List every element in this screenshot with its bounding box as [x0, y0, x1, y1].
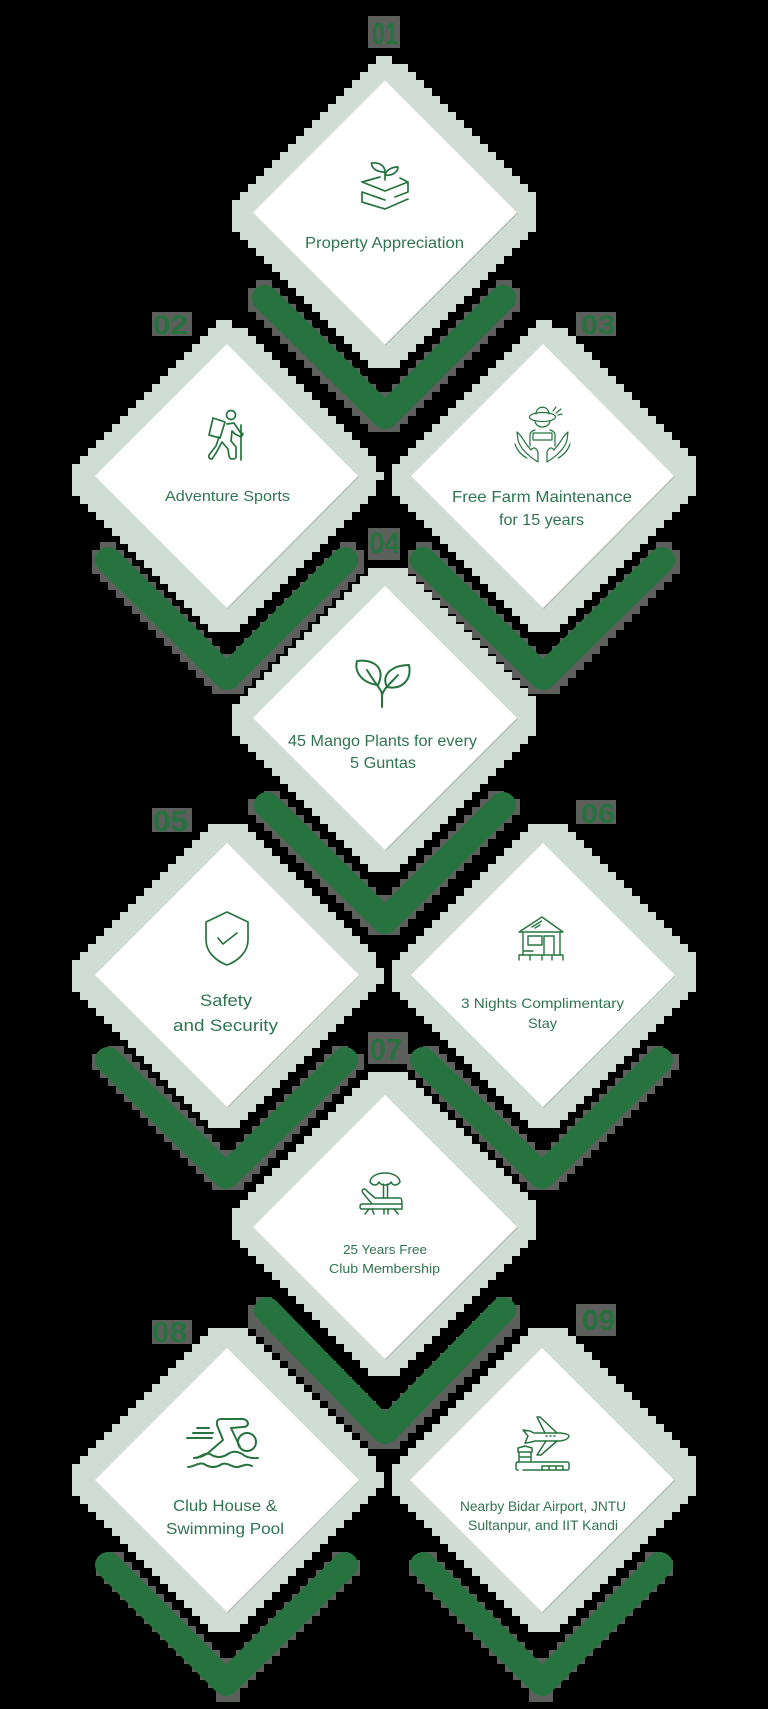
- chevron: below 08: [96, 1552, 360, 1702]
- icon: sun lounger and parasol: [360, 1173, 402, 1214]
- diamond 09: [392, 1328, 696, 1632]
- diamond 06: [392, 824, 696, 1128]
- icon: farmer with hands: [515, 407, 570, 462]
- panel: 01 Property Appreciation: [232, 16, 536, 368]
- diamond 01: [232, 56, 536, 368]
- chevron: below 06: [407, 1046, 679, 1190]
- panel: 09 Nearby Bidar Airport: [392, 1304, 696, 1632]
- diamond 03: [392, 320, 696, 632]
- diamond 05: [72, 824, 384, 1128]
- icon: swimmer: [187, 1419, 258, 1467]
- chevron: below 03: [408, 542, 680, 694]
- label: 25 Years Free Club Membership: [329, 1242, 440, 1276]
- number 07: 07: [370, 1032, 402, 1067]
- number 09: 09: [582, 1305, 615, 1337]
- label: Adventure Sports: Adventure Sports: [165, 488, 290, 505]
- label: 25 Years Free Club Membership: Club Membership: [329, 1261, 440, 1276]
- label: 45 Mango Plants for every 5 Guntas: 45 Mango Plants for every: [288, 733, 477, 750]
- icon: airplane and airport: [516, 1417, 569, 1470]
- chevron: below 02: [92, 542, 364, 694]
- diamond 07: [232, 1072, 536, 1376]
- icon: cottage: [519, 917, 563, 960]
- label: Club House & Swimming Pool: Club House &: [173, 1498, 277, 1515]
- chevron: below 07: [248, 1297, 520, 1449]
- panel: 04 45 Mango Plants: [232, 527, 536, 872]
- panel: 03 Free Farm Maintenance: [392, 310, 696, 632]
- diamond 04: [232, 568, 536, 872]
- diamond 08: [72, 1328, 384, 1632]
- diamond 02: [72, 320, 384, 632]
- label: Nearby Bidar Airport, JNTU Sultanpur, and IIT Kandi: Sultanpur, and IIT Kandi: [468, 1518, 618, 1533]
- number 04: 04: [369, 527, 400, 560]
- icon: sprout: [356, 661, 410, 707]
- label: Safety and Security: [173, 991, 279, 1035]
- label: 45 Mango Plants for every 5 Guntas: 5 Guntas: [350, 755, 416, 772]
- label: Free Farm Maintenance for 15 years: [452, 489, 632, 529]
- panel: 06 3 Nights Complimentary Stay: [392, 798, 696, 1128]
- label: Property Appreciation: Property Appreciation: [305, 235, 464, 252]
- label: Nearby Bidar Airport, JNTU Sultanpur, and IIT Kandi: Nearby Bidar Airport, JNTU: [460, 1499, 626, 1514]
- panel: 07 25 Years Free Club Membership: [232, 1032, 536, 1376]
- number 02: 02: [153, 310, 188, 340]
- icon: shield with check: [206, 912, 248, 965]
- label: 3 Nights Complimentary Stay: 3 Nights Complimentary: [461, 995, 624, 1011]
- chevron: below 05: [92, 1046, 364, 1190]
- label: Nearby Bidar Airport, JNTU Sultanpur, and IIT Kandi: [460, 1499, 626, 1533]
- label: 3 Nights Complimentary Stay: [461, 995, 624, 1031]
- label: 3 Nights Complimentary Stay: Stay: [528, 1015, 557, 1031]
- label: 25 Years Free Club Membership: 25 Years Free: [343, 1242, 427, 1257]
- label: Safety and Security: Safety: [200, 991, 253, 1010]
- label: Club House & Swimming Pool: [166, 1498, 284, 1538]
- panel: 02 Adventure Sports: [72, 310, 384, 632]
- label: Club House & Swimming Pool: Swimming Pool: [166, 1521, 284, 1538]
- label: Free Farm Maintenance for 15 years: Free Farm Maintenance: [452, 489, 632, 506]
- label: Free Farm Maintenance for 15 years: for 15 years: [499, 512, 584, 529]
- label: 45 Mango Plants for every 5 Guntas: [288, 733, 477, 772]
- number 03: 03: [581, 310, 615, 340]
- icon: crate with sprout: [362, 163, 408, 209]
- panel: 08 Club House and Swimming Pool: [72, 1317, 384, 1632]
- chevron: below 09: [409, 1552, 673, 1702]
- number 08: 08: [152, 1317, 187, 1349]
- label: Safety and Security: and Security: [173, 1016, 279, 1035]
- chevron: below 04: [248, 791, 520, 935]
- panel: 05 Safety and Security: [72, 806, 384, 1128]
- number 06: 06: [581, 798, 615, 829]
- icon: hiker: [209, 410, 243, 460]
- number 05: 05: [153, 806, 188, 838]
- chevron: below 01: [248, 280, 520, 432]
- number 01: 01: [372, 16, 398, 51]
